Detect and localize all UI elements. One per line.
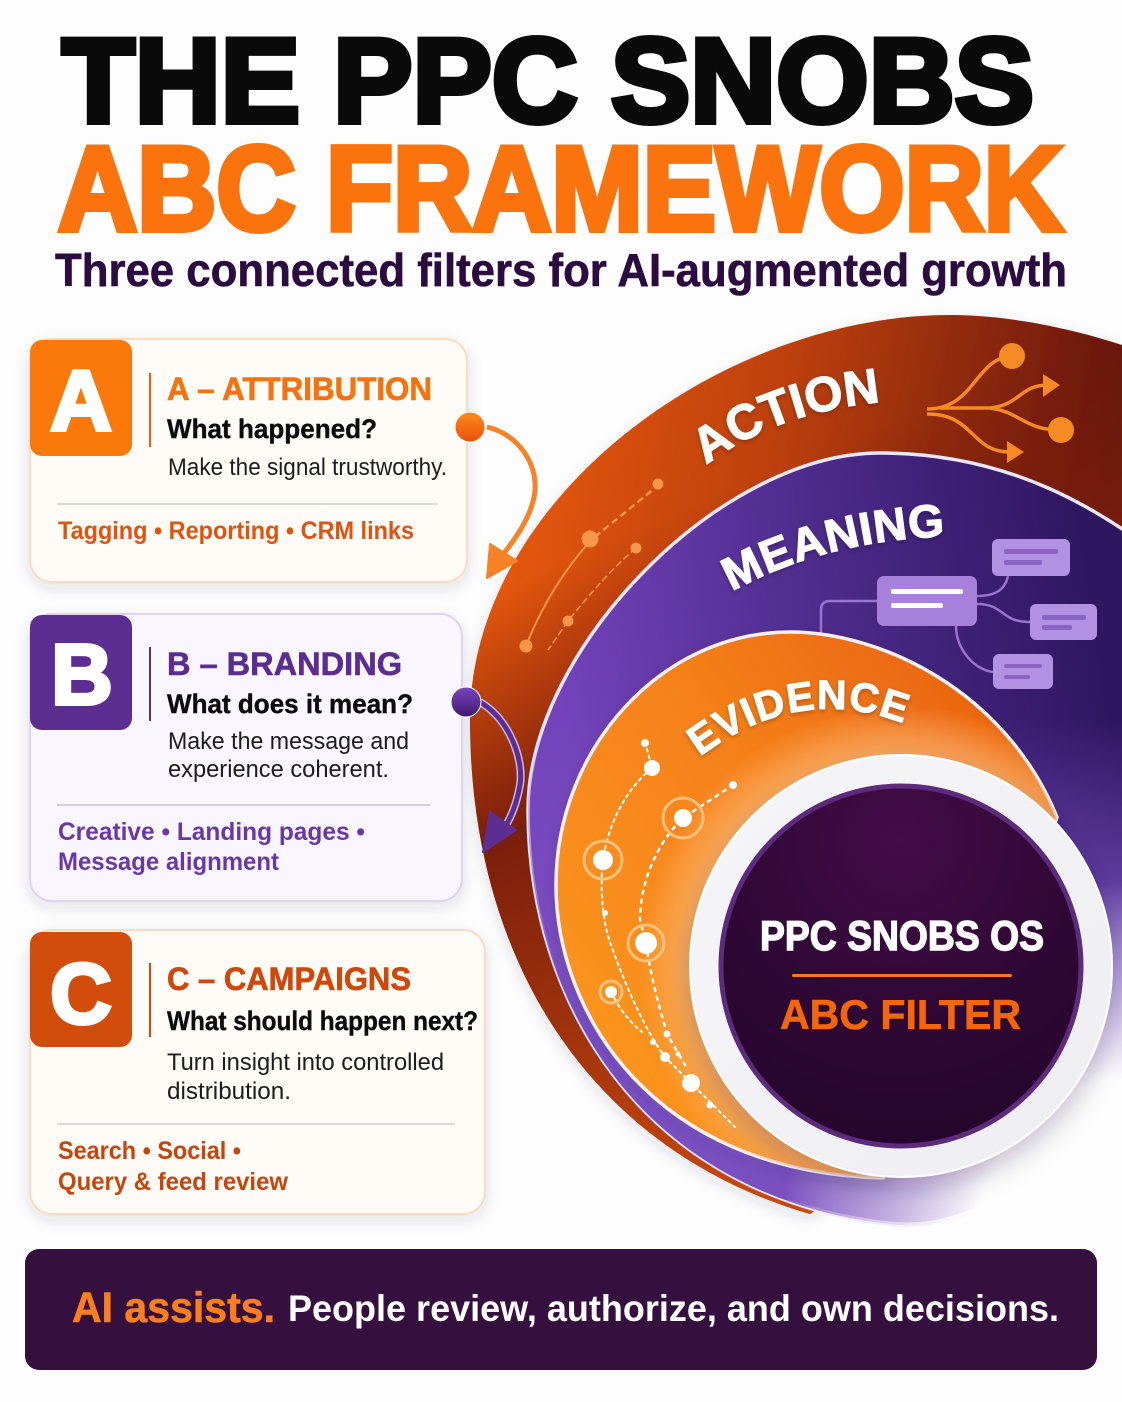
card C: campaigns xyxy=(30,930,485,1214)
action label: ACTION xyxy=(696,368,879,468)
card C: campaigns: Query & feed review xyxy=(58,1168,289,1196)
card A: attribution: Make the signal trustworthy. xyxy=(168,454,447,481)
subtitle: Three connected filters for AI-augmented growth xyxy=(55,244,1067,296)
badge B: B xyxy=(51,628,113,723)
card A: attribution: What happened? xyxy=(167,414,377,444)
icon: branching arrows xyxy=(927,343,1074,463)
evidence label: EVIDENCE xyxy=(684,680,912,758)
footer banner xyxy=(25,1249,1097,1370)
card B: branding: experience coherent. xyxy=(168,756,389,783)
badge B xyxy=(30,615,132,730)
center circle: ABC FILTER xyxy=(780,991,1021,1038)
icon: message map xyxy=(821,539,1097,689)
evidence signal trails xyxy=(584,739,737,1127)
heading A: A – ATTRIBUTION xyxy=(167,371,432,407)
card A: attribution xyxy=(30,339,467,582)
ring: evidence xyxy=(554,630,1059,1186)
title xyxy=(58,14,1063,256)
arrow: attribution to action xyxy=(455,412,535,578)
card C: campaigns: Search • Social • xyxy=(58,1137,241,1165)
card B: branding: Creative • Landing pages • xyxy=(58,818,365,846)
concentric diagram xyxy=(466,315,1122,1227)
badge A xyxy=(30,340,132,456)
card B: branding: What does it mean? xyxy=(167,689,413,719)
badge A: A xyxy=(50,354,112,449)
card B: branding xyxy=(30,614,462,901)
badge C xyxy=(30,932,132,1047)
badge C: C xyxy=(50,947,112,1042)
title: THE PPC SNOBS xyxy=(62,14,1034,148)
ring: action xyxy=(466,315,1122,1222)
heading B: B – BRANDING xyxy=(167,646,402,682)
ring: meaning xyxy=(526,451,1122,1227)
card C: campaigns: What should happen next? xyxy=(167,1006,478,1036)
card C: campaigns: Turn insight into controlled xyxy=(167,1049,444,1076)
footer banner: AI assists. xyxy=(72,1284,275,1332)
arrow: branding to meaning xyxy=(451,687,521,852)
footer banner: People review, authorize, and own decisions. xyxy=(288,1288,1059,1329)
heading C: C – CAMPAIGNS xyxy=(167,961,411,997)
card C: campaigns: distribution. xyxy=(167,1078,291,1105)
center circle xyxy=(690,755,1112,1177)
meaning label: MEANING xyxy=(719,504,943,593)
center text: PPC SNOBS OS xyxy=(760,912,1044,959)
card A: attribution: Tagging • Reporting • CRM links xyxy=(58,517,414,545)
action dotted paths xyxy=(520,478,664,652)
card B: branding: Make the message and xyxy=(168,728,409,755)
card B: branding: Message alignment xyxy=(58,848,280,876)
